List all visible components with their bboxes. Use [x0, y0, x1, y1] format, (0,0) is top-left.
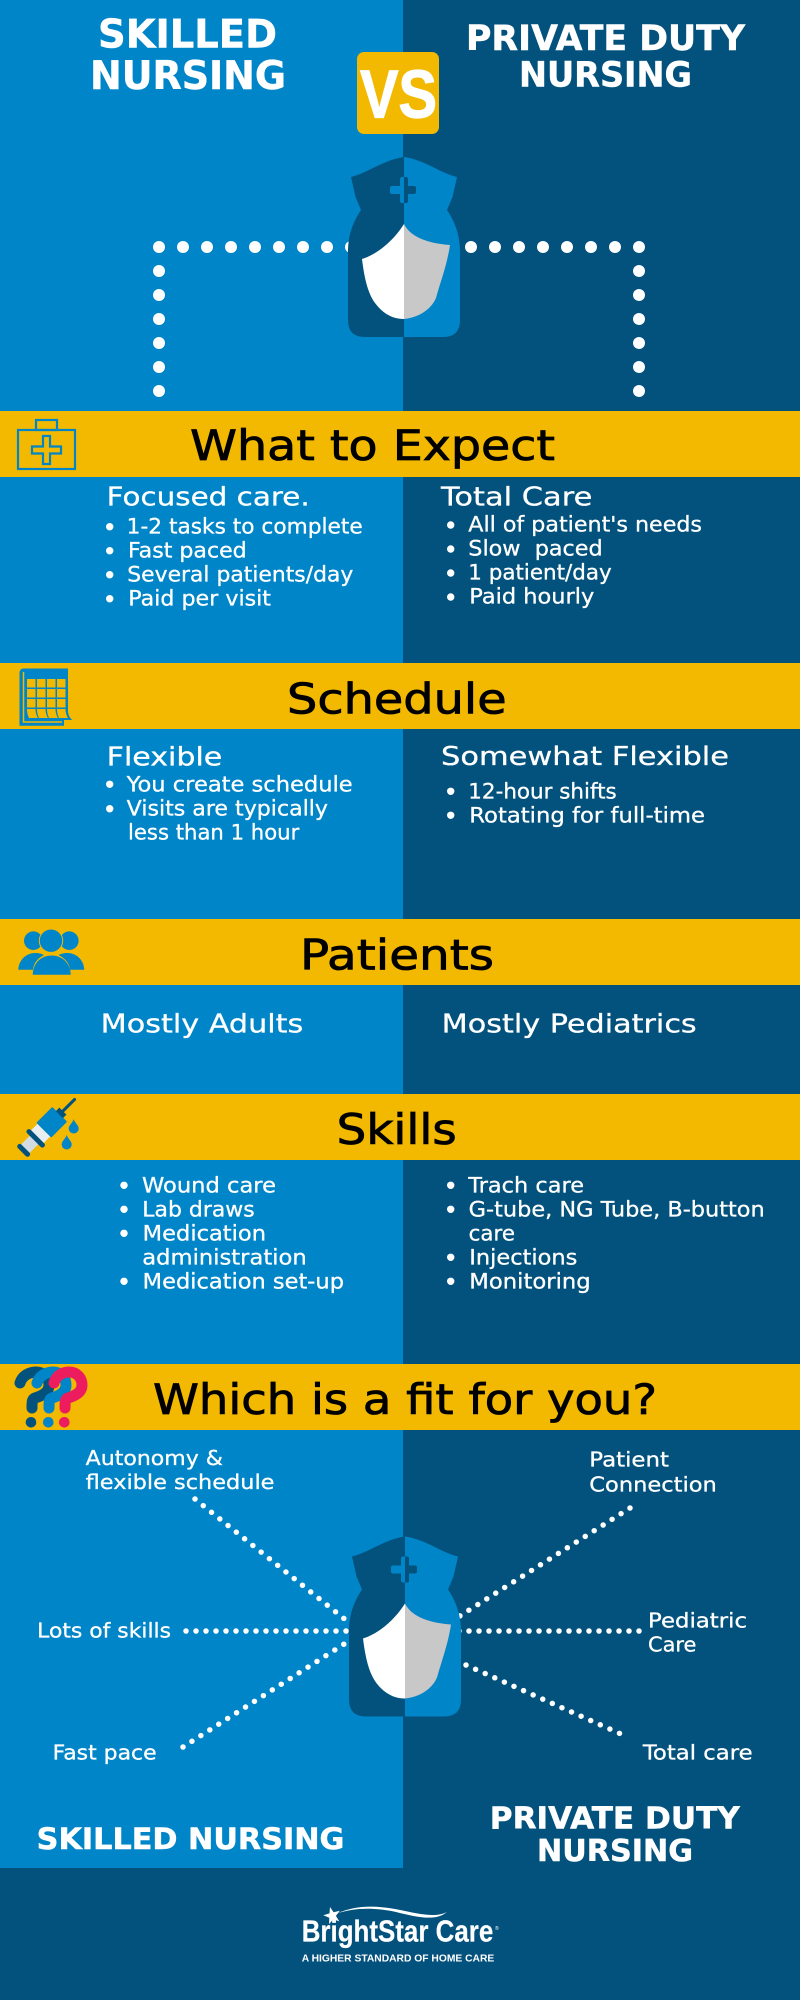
section band: patients — [0, 919, 800, 985]
panel: skills, private duty: G-tube, NG Tube, B-button — [469, 1197, 765, 1221]
heading: private duty nursing: NURSING — [519, 56, 692, 96]
section band: skills — [0, 1090, 800, 1161]
panel: what to expect, private duty: 1 patient/day — [468, 561, 612, 585]
panel: schedule, private duty: 12-hour shifts — [468, 779, 617, 803]
logo: brightstar care — [302, 1907, 499, 1964]
heading: skilled nursing: SKILLED — [98, 13, 277, 58]
labels: private duty traits: Patient — [589, 1448, 669, 1472]
panel: skills, private duty: care — [469, 1221, 515, 1245]
panel: what to expect, private duty: All of patient's needs — [468, 513, 702, 537]
heading: skilled nursing — [90, 13, 286, 99]
panel: skills, skilled: Wound care — [142, 1173, 276, 1197]
panel: skills, skilled — [120, 1173, 344, 1293]
footer heading: skilled nursing: SKILLED NURSING — [37, 1822, 344, 1856]
panel: schedule, skilled: less than 1 hour — [128, 821, 300, 845]
heading: patients: Patients — [300, 930, 494, 980]
text: mostly adults: Mostly Adults — [101, 1009, 303, 1039]
header — [90, 13, 746, 134]
logo: brightstar care: BrightStar Care — [302, 1914, 493, 1949]
labels: private duty traits: Total care — [642, 1740, 753, 1764]
logo: brightstar care: A HIGHER STANDARD OF HOME CARE — [302, 1952, 494, 1964]
panel: what to expect, skilled: Focused care. — [107, 482, 310, 512]
section band: what to expect — [0, 411, 800, 477]
background: left column — [0, 0, 403, 1868]
icon: question marks — [20, 1372, 82, 1428]
labels: private duty traits: Care — [648, 1633, 696, 1657]
panel: what to expect, skilled: Paid per visit — [128, 587, 271, 611]
labels: private duty traits — [589, 1448, 753, 1764]
heading: schedule: Schedule — [287, 674, 507, 724]
panel: what to expect, skilled: Fast paced — [128, 539, 247, 563]
panel: schedule, skilled: You create schedule — [126, 772, 353, 796]
labels: private duty traits: Connection — [589, 1472, 717, 1496]
panel: skills, skilled: administration — [142, 1245, 307, 1269]
dotted connector: left — [159, 247, 352, 391]
heading: skilled nursing: NURSING — [90, 54, 286, 99]
panel: schedule, skilled: Visits are typically — [127, 796, 328, 820]
panel: what to expect, private duty — [440, 482, 702, 609]
panel: schedule, private duty — [441, 742, 729, 827]
heading: private duty nursing: PRIVATE DUTY — [466, 19, 746, 59]
footer heading: private duty nursing — [490, 1801, 741, 1869]
labels: skilled nursing traits: Lots of skills — [37, 1619, 171, 1643]
icon: syringe with drops — [13, 1090, 84, 1161]
heading: what to expect: What to Expect — [190, 421, 555, 470]
panel: what to expect, skilled — [106, 482, 363, 611]
panel: schedule, private duty: Somewhat Flexible — [441, 742, 729, 772]
panel: schedule, skilled: Flexible — [107, 742, 222, 772]
dotted connector: right — [470, 247, 639, 391]
logo: brightstar care: ® — [495, 1925, 499, 1932]
heading: private duty nursing — [466, 19, 746, 96]
icon: calendar — [20, 668, 72, 726]
labels: skilled nursing traits — [37, 1446, 275, 1764]
labels: private duty traits: Pediatric — [648, 1609, 747, 1633]
icon: nurse — [348, 157, 460, 337]
panel: schedule, skilled — [106, 742, 353, 845]
section band: schedule — [0, 663, 800, 729]
heading: which is a fit for you: Which is a fit for you? — [153, 1375, 657, 1424]
labels: skilled nursing traits: Autonomy & — [86, 1446, 223, 1470]
panel: skills, private duty — [447, 1173, 765, 1293]
icon: first aid kit — [18, 420, 75, 469]
panel: skills, skilled: Lab draws — [142, 1197, 255, 1221]
panel: what to expect, private duty: Total Care — [440, 482, 592, 512]
panel: what to expect, skilled: 1-2 tasks to complete — [127, 514, 363, 538]
panel: skills, skilled: Medication — [143, 1221, 266, 1245]
labels: skilled nursing traits: flexible schedule — [86, 1470, 274, 1494]
footer heading: private duty nursing: PRIVATE DUTY — [490, 1801, 741, 1836]
panel: what to expect, private duty: Slow paced — [468, 537, 603, 561]
heading: skills: Skills — [337, 1105, 457, 1154]
dotted spokes — [183, 1499, 639, 1747]
panel: what to expect, skilled: Several patients/day — [127, 563, 353, 587]
icon: group of people — [18, 929, 84, 975]
panel: schedule, private duty: Rotating for full-time — [469, 803, 705, 827]
panel: what to expect, private duty: Paid hourly — [469, 585, 594, 609]
panel: skills, private duty: Trach care — [467, 1173, 584, 1197]
panel: skills, private duty: Monitoring — [469, 1269, 591, 1293]
labels: skilled nursing traits: Fast pace — [53, 1740, 157, 1764]
icon: nurse (bottom) — [349, 1536, 461, 1716]
vs badge: VS — [360, 57, 437, 133]
footer heading: private duty nursing: NURSING — [537, 1834, 693, 1869]
panel: skills, private duty: Injections — [469, 1245, 577, 1269]
panel: skills, skilled: Medication set-up — [143, 1269, 344, 1293]
section band: which is a fit for you — [0, 1364, 800, 1430]
text: mostly pediatrics: Mostly Pediatrics — [442, 1009, 697, 1039]
